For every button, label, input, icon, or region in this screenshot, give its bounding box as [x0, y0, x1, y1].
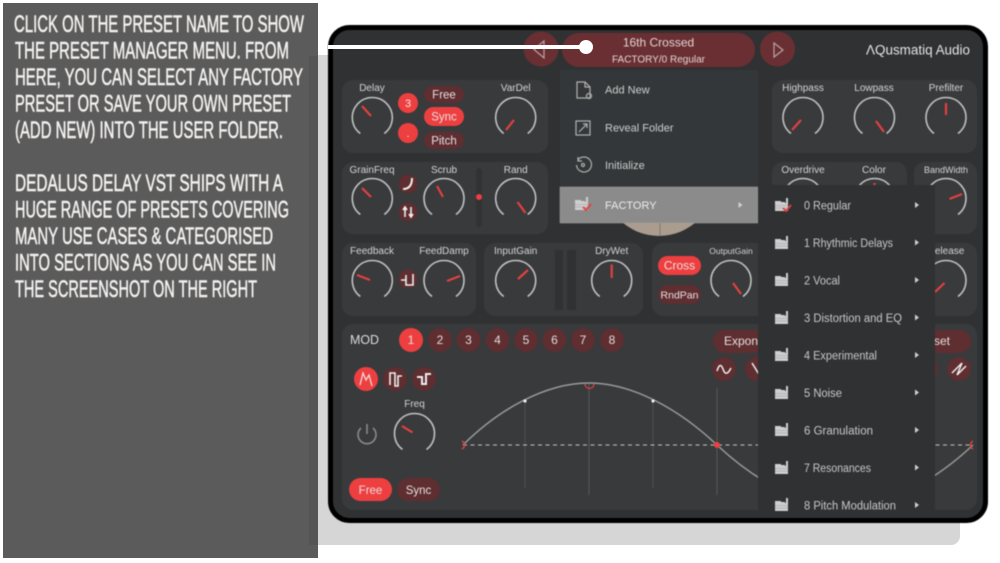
- menu item: add new: [577, 82, 650, 98]
- panel: filter: Highpass: [782, 83, 824, 94]
- panel: delay: Sync: [431, 112, 457, 124]
- icon: power: [358, 424, 376, 444]
- reset pill: [900, 330, 971, 353]
- submenu item: 4 experimental: 4 Experimental: [804, 350, 877, 362]
- panel: grain: [342, 162, 548, 234]
- mod slot buttons: 1: [408, 333, 415, 347]
- panel: output: Cross: [664, 258, 695, 272]
- mod type buttons: [354, 367, 436, 391]
- panel: delay: .: [406, 128, 410, 140]
- text block: preset manager instructions: (ADD NEW) INTO THE USER FOLDER.: [15, 117, 283, 144]
- button: next preset: [760, 32, 795, 66]
- mod slot buttons: 2: [437, 333, 444, 347]
- submenu item: 1 rhythmic delays: 1 Rhythmic Delays: [804, 238, 893, 250]
- submenu item: 6 granulation: 6 Granulation: [804, 426, 873, 438]
- panel: delay: VarDel: [501, 83, 531, 94]
- mod slot buttons: 4: [494, 333, 501, 347]
- panel: modulation: Freq: [404, 399, 425, 410]
- panel: bandwidth: BandWidth: [924, 165, 968, 175]
- panel: modulation: MOD: [350, 333, 379, 347]
- panel: modulation: [342, 324, 977, 510]
- text block: preset manager instructions: THE SCREENSHOT ON THE RIGHT: [15, 276, 257, 303]
- preset name pill: [562, 33, 755, 67]
- panel: output: OutputGain: [709, 246, 753, 256]
- text block: preset manager instructions: THE PRESET MANAGER MENU. FROM: [15, 38, 289, 64]
- text block: preset manager instructions: PRESET OR SAVE YOUR OWN PRESET: [15, 90, 291, 118]
- panel: modulation: Free: [359, 485, 382, 497]
- panel: feedback: FeedDamp: [419, 246, 469, 257]
- mod slot buttons: 7: [580, 333, 587, 347]
- preset name pill: FACTORY/0 Regular: [612, 54, 706, 66]
- panel: instructions: [3, 3, 318, 558]
- button: previous preset: [524, 32, 558, 66]
- panel: modulation: Sync: [406, 485, 432, 497]
- menu item: reveal folder: [576, 121, 674, 135]
- chart: modulation curve: [462, 383, 973, 507]
- preset name pill: 16th Crossed: [623, 36, 694, 50]
- menu item: reveal folder: Reveal Folder: [605, 122, 674, 134]
- text block: preset manager instructions: MANY USE CASES & CATEGORISED: [15, 223, 273, 250]
- panel: release: Release: [928, 246, 965, 257]
- reset pill: Reset: [919, 334, 951, 348]
- text block: preset manager instructions: [14, 11, 304, 303]
- text block: preset manager instructions: HERE, YOU CAN SELECT ANY FACTORY: [15, 64, 303, 91]
- panel: delay: [342, 80, 548, 153]
- panel: gain: InputGain: [494, 246, 537, 257]
- panel: output: [652, 243, 767, 316]
- panel: gain: DryWet: [595, 246, 628, 257]
- submenu item: 2 vocal: [775, 273, 919, 288]
- drop shadow behind plugin screenshot: [308, 55, 960, 545]
- submenu item: 1 rhythmic delays: [775, 236, 919, 250]
- submenu item: 8 pitch modulation: 8 Pitch Modulation: [804, 500, 896, 512]
- menu item: factory: FACTORY: [605, 200, 657, 212]
- menu item: add new: Add New: [605, 84, 650, 96]
- text block: preset manager instructions: HUGE RANGE OF PRESETS COVERING: [15, 196, 289, 224]
- panel: release: [772, 243, 977, 316]
- panel: grain: Scrub: [431, 165, 457, 176]
- panel: delay: Delay: [359, 83, 385, 94]
- submenu item: 0 regular: 0 Regular: [804, 200, 851, 212]
- submenu item: 7 resonances: [775, 461, 919, 475]
- submenu item: 8 pitch modulation: [775, 498, 919, 512]
- panel: bandwidth: [914, 162, 977, 234]
- panel: factory submenu: [758, 185, 935, 518]
- brand logo: ΛQusmatiq Audio: [866, 42, 970, 58]
- panel: preset manager menu: [560, 70, 758, 223]
- menu item: factory: [560, 187, 758, 223]
- panel: grain: Rand: [504, 165, 528, 176]
- curve type pill: [713, 330, 773, 353]
- submenu item: 5 noise: 5 Noise: [804, 388, 842, 400]
- wave shape buttons: [712, 357, 971, 381]
- mod slot buttons: 5: [523, 333, 530, 347]
- panel: grain: GrainFreq: [349, 165, 395, 176]
- panel: plugin window: [330, 28, 986, 520]
- submenu item: 3 distortion and eq: 3 Distortion and EQ: [804, 313, 902, 325]
- submenu item: 7 resonances: 7 Resonances: [804, 463, 871, 475]
- text block: preset manager instructions: INTO SECTIONS AS YOU CAN SEE IN: [15, 250, 276, 276]
- menu item: initialize: Initialize: [605, 160, 645, 172]
- submenu item: 2 vocal: 2 Vocal: [804, 276, 840, 288]
- panel: drive: Color: [862, 165, 887, 176]
- submenu item: 0 regular: [775, 198, 919, 212]
- beige disc peeking under menu: [603, 124, 715, 236]
- panel: drive: Overdrive: [781, 165, 825, 176]
- mod slot buttons: 6: [551, 333, 558, 347]
- panel: filter: Lowpass: [854, 83, 894, 94]
- panel: drive: [772, 162, 907, 234]
- panel: output: RndPan: [661, 290, 699, 302]
- mod slot buttons: 3: [465, 333, 472, 347]
- text block: preset manager instructions: DEDALUS DELAY VST SHIPS WITH A: [15, 170, 283, 197]
- panel: feedback: Feedback: [350, 246, 395, 257]
- panel: filter: Prefilter: [929, 83, 964, 94]
- panel: delay: Pitch: [431, 136, 457, 148]
- submenu item: 4 experimental: [775, 348, 919, 362]
- curve type pill: Expon: [724, 334, 758, 348]
- submenu item: 5 noise: [775, 386, 919, 400]
- panel: feedback: [342, 243, 476, 316]
- mod slot buttons: 8: [609, 333, 616, 347]
- submenu item: 6 granulation: [775, 423, 919, 438]
- panel: delay: 3: [405, 98, 411, 110]
- submenu item: 3 distortion and eq: [775, 311, 919, 325]
- panel: gain: [484, 243, 643, 316]
- text block: preset manager instructions: CLICK ON THE PRESET NAME TO SHOW: [14, 11, 304, 38]
- menu item: initialize: [576, 157, 645, 172]
- mod slot buttons: [399, 328, 624, 352]
- panel: delay: Free: [432, 90, 456, 102]
- panel: filter: [772, 80, 977, 153]
- arrow: callout line to preset name: [328, 40, 593, 54]
